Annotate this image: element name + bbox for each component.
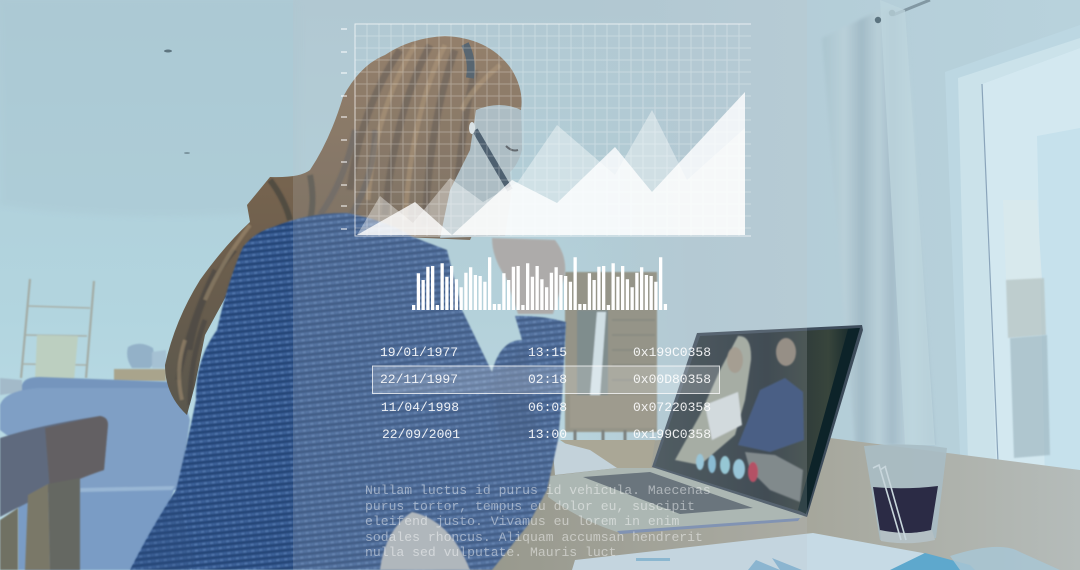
row 2: 22/11/1997: [380, 372, 458, 387]
equalizer bar chart: [412, 257, 667, 310]
row 2: 02:18: [528, 372, 567, 387]
area chart with grid: [341, 24, 751, 236]
row 3: [381, 400, 711, 415]
side table and vases: [114, 344, 167, 381]
paragraph text: Nullam luctus id purus id vehicula. Maecenas: [365, 483, 711, 498]
row 4: [382, 427, 711, 442]
papers on desk: [572, 533, 1060, 570]
chart grid: [355, 24, 751, 236]
face and neck: [440, 105, 522, 238]
ladder shelf and towel: [21, 279, 94, 380]
desk surface: [470, 438, 1080, 570]
paragraph text: purus tortor, tempus eu dolor eu, suscipit: [365, 499, 695, 514]
sofa: [0, 377, 190, 570]
y axis ticks: [341, 29, 347, 229]
notebook on desk: [552, 440, 617, 475]
glass of dark drink: [864, 444, 947, 543]
hair: [165, 36, 522, 415]
row 1: 0x199C0358: [633, 345, 711, 360]
row 3: 11/04/1998: [381, 400, 459, 415]
laptop: [548, 325, 863, 534]
hands: [380, 238, 565, 570]
paragraph text: nulla sed vulputate. Mauris luct: [365, 545, 616, 560]
row 4: 13:00: [528, 427, 567, 442]
curtains and rod: [822, 0, 935, 445]
paragraph text: [365, 483, 711, 560]
back area series: [357, 110, 745, 235]
row 1: 13:15: [528, 345, 567, 360]
row 2: 0x00D80358: [633, 372, 711, 387]
sweater: [130, 213, 566, 570]
highlighted row: [372, 366, 720, 394]
paragraph text: sodales rhoncus. Aliquam accumsan hendrerit: [365, 530, 703, 545]
laptop base and keyboard: [548, 468, 806, 532]
row 4: 22/09/2001: [382, 427, 460, 442]
translucent center panel: [293, 0, 807, 570]
window and door frame: [945, 25, 1080, 570]
row 2: [380, 372, 711, 387]
row 4: 0x199C0358: [633, 427, 711, 442]
data table: [372, 345, 720, 442]
row 1: 19/01/1977: [380, 345, 458, 360]
front area series: [357, 92, 745, 235]
people on video call: [675, 336, 804, 502]
row 3: 0x07220358: [633, 400, 711, 415]
chart frame: [355, 24, 751, 236]
wooden chair: [0, 416, 108, 570]
paragraph text: eleifend justo. Vivamus eu lorem in enim: [365, 514, 679, 529]
laptop screen: [652, 325, 863, 517]
row 3: 06:08: [528, 400, 567, 415]
wooden cabinet in background: [565, 272, 657, 448]
row 1: [380, 345, 711, 360]
